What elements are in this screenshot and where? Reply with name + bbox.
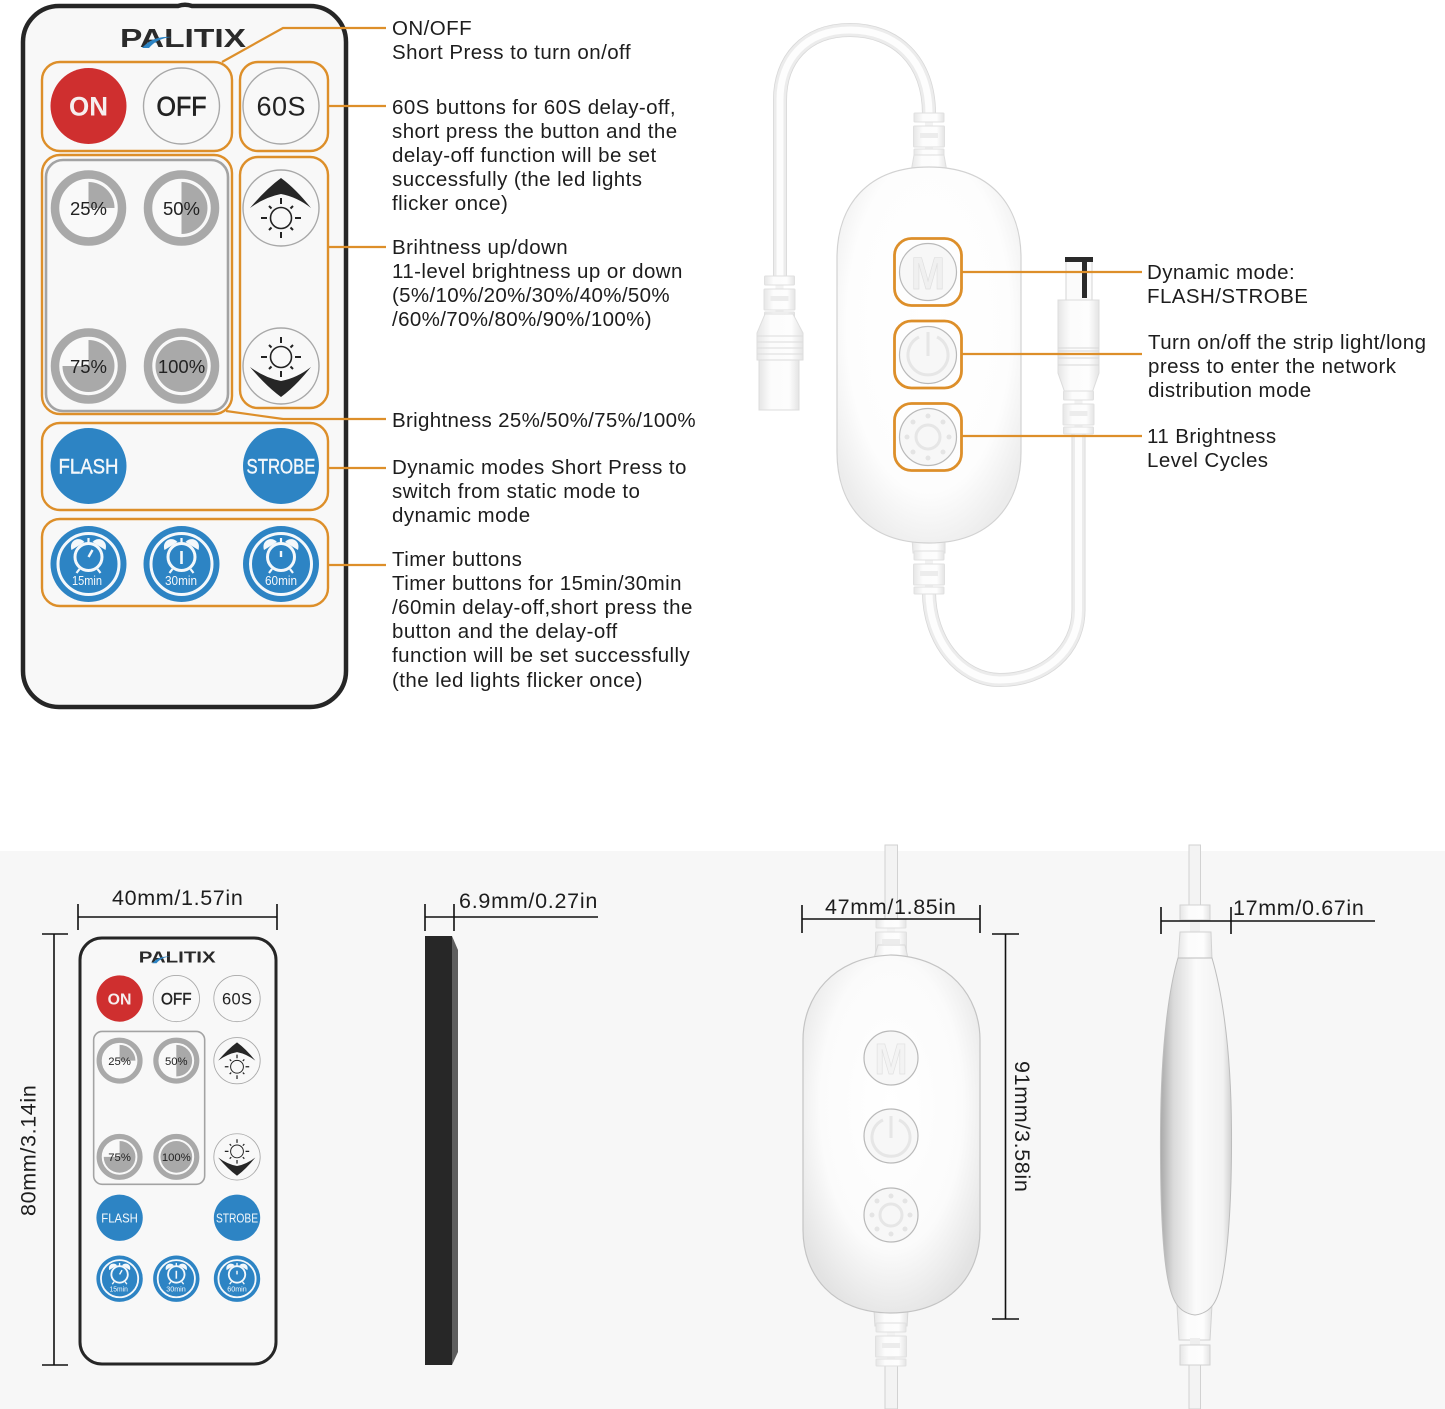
- button: 100%: 100%: [158, 356, 205, 377]
- text block: 11 brightness: [1147, 425, 1277, 472]
- side view cable: [1189, 845, 1200, 1409]
- text block: timer buttons: button and the delay-off: [392, 620, 618, 643]
- dimension: controller height: 91mm/3.58in: [1010, 1061, 1034, 1192]
- front view button: power: [864, 1109, 918, 1163]
- front view button: M: [864, 1031, 918, 1085]
- text block: timer buttons: (the led lights flicker once): [392, 669, 643, 692]
- button: timer 30min: 30min: [165, 574, 197, 588]
- text block: ON/OFF: [392, 17, 631, 64]
- small button: OFF: [153, 975, 199, 1022]
- dimension: remote thickness: [425, 889, 598, 931]
- button: 50%: 50%: [163, 198, 200, 219]
- small button: STROBE: [214, 1195, 260, 1241]
- text block: 60S delay-off: delay-off function will be set: [392, 144, 657, 167]
- text block: 60S delay-off: [392, 96, 678, 215]
- text block: timer buttons: /60min delay-off,short press the: [392, 596, 693, 619]
- text block: brightness up/down: Brihtness up/down: [392, 236, 568, 259]
- text block: 60S delay-off: successfully (the led lights: [392, 168, 642, 191]
- small button: 25%: [99, 1040, 140, 1081]
- button: 60S: 60S: [256, 92, 306, 122]
- small button: FLASH: FLASH: [101, 1210, 138, 1225]
- controller side view: [1160, 845, 1232, 1409]
- strain relief: bottom: [912, 538, 945, 594]
- text block: brightness presets: Brightness 25%/50%/75%/100%: [392, 409, 696, 432]
- text block: brightness up/down: (5%/10%/20%/30%/40%/50%: [392, 284, 670, 307]
- small button: 30min: [153, 1256, 199, 1302]
- text block: ON/OFF: ON/OFF: [392, 17, 472, 40]
- text block: timer buttons: [392, 548, 693, 692]
- front view strain reliefs: [874, 919, 908, 1366]
- text block: 11 brightness: 11 Brightness: [1147, 425, 1277, 448]
- button: 75%: 75%: [70, 356, 107, 377]
- button: timer 60min: 60min: [265, 574, 297, 588]
- dimension: remote width: [78, 886, 277, 930]
- button: brightness up: [243, 170, 319, 246]
- button: M: [900, 244, 956, 300]
- dimension: controller width: 47mm/1.85in: [825, 895, 956, 919]
- small button: brightness up: [214, 1038, 260, 1084]
- small button: 50%: [156, 1040, 197, 1081]
- text block: turn on/off: [1148, 331, 1426, 402]
- small button: 60S: 60S: [222, 990, 252, 1008]
- small button: OFF: OFF: [161, 990, 192, 1008]
- connector: DC female: [757, 276, 803, 410]
- dimension: controller height: [992, 934, 1034, 1319]
- small button: 100%: 100%: [162, 1152, 191, 1164]
- text block: dynamic modes: dynamic mode: [392, 504, 531, 527]
- text block: brightness up/down: /60%/70%/80%/90%/100%): [392, 308, 652, 331]
- text block: dynamic modes: Dynamic modes Short Press to: [392, 456, 687, 479]
- button: OFF: OFF: [156, 92, 206, 122]
- controller front view: [803, 845, 980, 1409]
- grey brightness group frame: [46, 160, 228, 411]
- text block: timer buttons: Timer buttons for 15min/30min: [392, 572, 682, 595]
- button: timer 60min: [243, 526, 319, 602]
- text block: dynamic mode: [1147, 261, 1308, 308]
- button: timer 30min: [144, 526, 220, 602]
- text block: turn on/off: press to enter the network: [1148, 355, 1397, 378]
- button: M: M: [911, 248, 945, 299]
- dimension: controller width: [802, 895, 980, 933]
- text block: dynamic mode: FLASH/STROBE: [1147, 285, 1308, 308]
- small button: 25%: 25%: [108, 1056, 131, 1068]
- small button: brightness down: [214, 1134, 260, 1180]
- side view body: [1160, 958, 1232, 1315]
- text block: brightness up/down: [392, 236, 683, 331]
- small button: 60min: 60min: [227, 1284, 247, 1293]
- button: 60S: [243, 68, 319, 144]
- button: OFF: [144, 68, 220, 144]
- text block: 11 brightness: Level Cycles: [1147, 449, 1268, 472]
- button: STROBE: STROBE: [246, 456, 316, 478]
- button: 50%: [148, 174, 215, 242]
- small button: 60min: [214, 1256, 260, 1302]
- remote body: [23, 5, 346, 707]
- dimension: remote height: 80mm/3.14in: [16, 1085, 40, 1216]
- text block: ON/OFF: Short Press to turn on/off: [392, 41, 631, 64]
- button: 25%: 25%: [70, 198, 107, 219]
- small remote buttons: [94, 950, 260, 1302]
- dimension: remote thickness: 6.9mm/0.27in: [459, 889, 598, 913]
- small button: 100%: [156, 1136, 197, 1177]
- text block: timer buttons: function will be set successfully: [392, 644, 691, 667]
- cables: [780, 30, 1078, 680]
- orange highlight frames on controller: [894, 238, 962, 470]
- button: power: [900, 326, 956, 384]
- text block: 60S delay-off: short press the button and the: [392, 120, 678, 143]
- button: ON: ON: [69, 92, 108, 122]
- small grey brightness frame: [94, 1031, 205, 1184]
- strain relief: top: [911, 113, 947, 172]
- text block: 60S delay-off: flicker once): [392, 192, 508, 215]
- small button: ON: ON: [108, 990, 131, 1008]
- text block: turn on/off: Turn on/off the strip light/long: [1148, 331, 1426, 354]
- text block: 60S delay-off: 60S buttons for 60S delay-off,: [392, 96, 676, 119]
- button: timer 15min: 15min: [72, 574, 102, 588]
- orange highlight frames on remote: [42, 62, 328, 606]
- button: STROBE: [243, 428, 319, 504]
- button: brightness cycle: [900, 408, 956, 466]
- button: timer 15min: [50, 526, 126, 602]
- dimension: controller thickness: 17mm/0.67in: [1233, 896, 1364, 920]
- button: FLASH: [50, 428, 126, 504]
- small button: 50%: 50%: [165, 1056, 188, 1068]
- small button: 15min: 15min: [110, 1284, 128, 1293]
- panel: large remote control: [23, 5, 346, 707]
- remote side view: [425, 936, 458, 1365]
- front view body: [803, 955, 980, 1313]
- button: 25%: [55, 174, 122, 242]
- panel: inline controller with cables: [757, 30, 1099, 680]
- small button: 75%: 75%: [108, 1152, 131, 1164]
- small button: STROBE: STROBE: [216, 1210, 258, 1225]
- dimension: remote width: 40mm/1.57in: [112, 886, 243, 910]
- small logo: PALITIX: [139, 950, 216, 967]
- front view cable: [885, 845, 898, 1409]
- callout lines: controller: [962, 272, 1142, 436]
- text block: dynamic modes: [392, 456, 687, 527]
- controller body: [837, 167, 1021, 543]
- dimension: controller thickness: [1161, 896, 1375, 934]
- small button: ON: [96, 975, 143, 1022]
- small remote body: [80, 938, 276, 1364]
- front view button: M: M: [874, 1035, 908, 1084]
- text block: dynamic modes: switch from static mode to: [392, 480, 640, 503]
- small button: 60S: [214, 975, 260, 1022]
- button: 75%: [55, 332, 122, 400]
- logo: PALITIX: PALITIX: [120, 23, 247, 53]
- small button: 75%: [99, 1136, 140, 1177]
- small button: 15min: [96, 1256, 143, 1302]
- button: FLASH: FLASH: [58, 456, 118, 478]
- button: ON: [50, 68, 126, 144]
- callout lines: remote: [222, 28, 386, 565]
- background panel: dimensions section: [0, 851, 1445, 1409]
- side view strain reliefs: [1177, 905, 1212, 1365]
- small button: 30min: 30min: [166, 1284, 186, 1293]
- small button: FLASH: [96, 1195, 143, 1241]
- connector: DC male jack: [1058, 257, 1099, 434]
- button: brightness down: [243, 328, 319, 404]
- text block: turn on/off: distribution mode: [1148, 379, 1312, 402]
- text block: timer buttons: Timer buttons: [392, 548, 522, 571]
- front view button: cycle: [864, 1188, 918, 1242]
- text block: dynamic mode: Dynamic mode:: [1147, 261, 1295, 284]
- text block: brightness up/down: 11-level brightness up or down: [392, 260, 683, 283]
- panel: small remote front view: [80, 938, 276, 1364]
- dimension: remote height: [16, 934, 68, 1365]
- button: 100%: [148, 332, 215, 400]
